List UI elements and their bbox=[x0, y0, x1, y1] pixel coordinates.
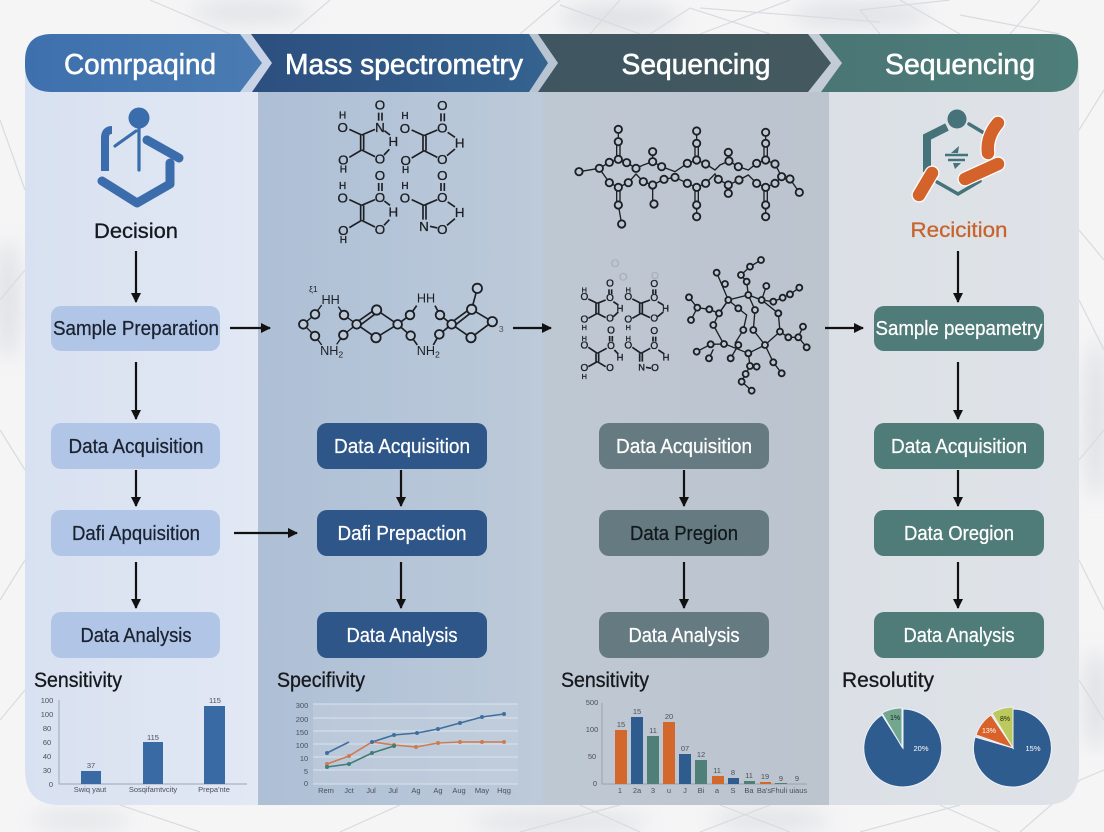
label: Decision: Decision bbox=[94, 220, 178, 243]
molecule: small acid grid: H bbox=[617, 303, 623, 313]
icon: blue hexagon decision bbox=[102, 108, 179, 203]
molecule: four acid structures: H bbox=[402, 165, 409, 176]
bar chart: sensitivity: 80 bbox=[43, 724, 51, 733]
molecule: four acid structures: N bbox=[375, 120, 385, 135]
header: Sequencing right: Sequencing bbox=[885, 49, 1035, 81]
header: Compound: Comrpaqind bbox=[64, 49, 216, 81]
molecule: four acid structures: O bbox=[338, 152, 349, 167]
heading: Specifivity: Specifivity bbox=[277, 669, 365, 692]
molecule: amine chain: HH bbox=[322, 293, 340, 307]
molecule: small acid grid: N bbox=[638, 362, 645, 372]
molecule: small acid grid: O bbox=[607, 325, 615, 336]
header: Mass spectrometry bbox=[251, 34, 548, 92]
molecule: small acid grid: O bbox=[651, 363, 659, 374]
bar chart: sensitivity by category: 9 bbox=[779, 774, 783, 783]
box: Data Acquisition: Data Acquisition bbox=[334, 436, 470, 458]
box: Data Acquisition bbox=[874, 423, 1044, 469]
line chart: specificity: 5 bbox=[304, 767, 308, 776]
molecule: small acid grid: H bbox=[626, 323, 631, 332]
molecule: amine chain: 2 bbox=[435, 349, 440, 359]
bar chart: sensitivity by category: 50 bbox=[588, 752, 596, 761]
bar chart: sensitivity by category: 8 bbox=[731, 768, 735, 777]
header: Sequencing: Sequencing bbox=[622, 49, 770, 81]
molecule: small acid grid: O bbox=[650, 326, 658, 337]
icon: teal and orange hexagon bbox=[919, 110, 998, 195]
line chart: specificity: 300 bbox=[296, 701, 308, 710]
molecule: small acid grid: H bbox=[663, 352, 669, 362]
box: Sample peepametry: Sample peepametry bbox=[876, 318, 1042, 340]
box: Data Pregion bbox=[599, 510, 769, 556]
box: Data Acquisition bbox=[317, 423, 487, 469]
molecule: four acid structures: H bbox=[340, 164, 347, 175]
molecule: four acid structures: O bbox=[400, 190, 410, 205]
bar chart: sensitivity: 30 bbox=[43, 766, 51, 775]
molecule: small acid grid: O bbox=[611, 258, 620, 270]
header: Sequencing bbox=[538, 34, 831, 92]
pie chart: left bbox=[864, 708, 942, 787]
molecule: small acid grid: O bbox=[650, 293, 658, 304]
molecule: amine chain: NH bbox=[320, 344, 338, 358]
bar chart: sensitivity by category: S bbox=[730, 786, 736, 795]
molecule: small acid grid: H bbox=[662, 303, 669, 313]
pie chart: right: 13% bbox=[982, 728, 996, 735]
molecule: small acid grid: O bbox=[651, 271, 659, 282]
bar chart: sensitivity by category: u bbox=[667, 786, 671, 795]
pie chart: right: 8% bbox=[1000, 716, 1010, 723]
flow arrows bbox=[136, 251, 958, 608]
bar chart: sensitivity by category: 12 bbox=[697, 750, 705, 759]
box: Data Analysis: Data Analysis bbox=[628, 625, 740, 647]
molecule: small acid grid: O bbox=[607, 341, 615, 352]
bar chart: sensitivity by category: 3 bbox=[651, 786, 655, 795]
column 1 flow boxes bbox=[51, 306, 220, 658]
bar chart: sensitivity: Prepa'nte bbox=[198, 785, 230, 794]
molecule: small acid grid: O bbox=[624, 340, 632, 351]
box: Sample Preparation bbox=[51, 306, 220, 351]
molecule: four acid structures: H bbox=[455, 135, 464, 150]
molecule: small acid grid: O bbox=[580, 363, 588, 374]
bar chart: sensitivity by category: 11 bbox=[649, 726, 657, 735]
box: Data Analysis: Data Analysis bbox=[904, 625, 1014, 647]
line chart: specificity: 100 bbox=[296, 741, 308, 750]
molecule: four acid structures: H bbox=[389, 134, 398, 149]
box: Data Acquisition bbox=[51, 423, 220, 469]
molecule: small acid grid: H bbox=[617, 352, 623, 362]
bar chart: sensitivity: 60 bbox=[43, 738, 51, 747]
molecule: four acid structures: H bbox=[401, 111, 409, 122]
column 2 flow boxes bbox=[317, 423, 487, 658]
molecule: four acid structures: O bbox=[375, 190, 385, 205]
box: Dafi Apquisition: Dafi Apquisition bbox=[72, 523, 200, 545]
line chart: specificity: Jct bbox=[344, 786, 355, 795]
bar chart: sensitivity by category: 2a bbox=[633, 786, 642, 795]
molecule: four acid structures: O bbox=[375, 97, 385, 112]
bar chart: sensitivity by category: Bi bbox=[698, 786, 705, 795]
molecule: four acid structures: O bbox=[375, 222, 385, 237]
panel: sequencing column bbox=[543, 60, 829, 805]
box: Data Oregion bbox=[874, 510, 1044, 556]
molecule: amine chain: ξ1 bbox=[309, 284, 318, 294]
header: Mass spectrometry: Mass spectrometry bbox=[285, 49, 523, 81]
molecule: small acid grid: O bbox=[650, 313, 658, 324]
bar chart: sensitivity by category: 9 bbox=[795, 774, 799, 783]
line chart: specificity: Jul bbox=[388, 786, 398, 795]
pie chart: left: 1% bbox=[890, 715, 900, 722]
bar chart: sensitivity by category: Fhuli uiaus bbox=[771, 786, 807, 795]
bar chart: sensitivity by category: 1 bbox=[618, 786, 622, 795]
box: Data Oregion: Data Oregion bbox=[904, 523, 1014, 545]
molecule: small acid grid: O bbox=[624, 314, 632, 325]
molecule: four acid structures: O bbox=[437, 98, 448, 113]
line chart: specificity: Rem bbox=[318, 786, 334, 795]
molecule: four acid structures: H bbox=[339, 181, 346, 192]
bar chart: sensitivity by category: 07 bbox=[681, 744, 689, 753]
box: Sample Preparation: Sample Preparation bbox=[53, 318, 219, 340]
molecule: four acid structures: O bbox=[437, 190, 448, 205]
molecule: four acid structures: H bbox=[340, 235, 347, 246]
line chart: specificity: 150 bbox=[296, 728, 308, 737]
bar chart: sensitivity bbox=[41, 696, 247, 794]
molecule: small acid grid: O bbox=[624, 292, 632, 303]
bar chart: sensitivity by category: 11 bbox=[713, 766, 721, 775]
molecule: four acid structures: O bbox=[437, 168, 448, 183]
bar chart: sensitivity by category: 19 bbox=[761, 772, 769, 781]
box: Data Analysis bbox=[599, 612, 769, 658]
heading: Sensitivity: Sensitivity bbox=[561, 669, 649, 692]
box: Data Analysis bbox=[317, 612, 487, 658]
line chart: specificity: Jul bbox=[366, 786, 376, 795]
bar chart: sensitivity by category: Ba bbox=[744, 786, 754, 795]
panel: mass spectrometry column bbox=[258, 60, 543, 805]
box: Data Acquisition bbox=[599, 423, 769, 469]
molecule: four acid structures: H bbox=[339, 110, 346, 121]
bar chart: sensitivity by category: 20 bbox=[665, 712, 673, 721]
line chart: specificity: Ag bbox=[411, 786, 421, 795]
molecule: four acid structures: O bbox=[437, 120, 448, 135]
box: Data Analysis bbox=[874, 612, 1044, 658]
box: Sample peepametry bbox=[874, 306, 1044, 351]
molecule: four acid structures: O bbox=[375, 168, 385, 183]
molecule: small acid grid: O bbox=[580, 314, 588, 325]
molecule: four acid structures: H bbox=[389, 204, 398, 219]
box: Data Analysis bbox=[51, 612, 220, 658]
bar chart: sensitivity by category: 100 bbox=[586, 725, 598, 734]
molecule: four acid structures: O bbox=[437, 152, 448, 167]
line chart: specificity: 200 bbox=[296, 715, 308, 724]
bar chart: sensitivity by category: 11 bbox=[745, 771, 753, 780]
pie chart: right bbox=[973, 707, 1051, 787]
molecule: small acid grid: H bbox=[582, 323, 587, 332]
line chart: specificity bbox=[296, 701, 518, 795]
molecule: small acid grid: H bbox=[582, 334, 587, 343]
molecule: small acid grid: H bbox=[626, 334, 631, 343]
box: Data Acquisition: Data Acquisition bbox=[68, 436, 204, 458]
molecule: small acid grid: H bbox=[626, 285, 631, 294]
bar chart: sensitivity: 115 bbox=[209, 696, 221, 705]
molecule: four acid structures: H bbox=[401, 181, 409, 192]
chevron separator bands bbox=[238, 34, 842, 92]
molecule: four acid structures: O bbox=[437, 222, 448, 237]
box: Data Acquisition: Data Acquisition bbox=[616, 436, 752, 458]
molecule: small acid grid: O bbox=[606, 293, 614, 304]
panel: compound column bbox=[25, 60, 258, 805]
header: Sequencing right bbox=[819, 34, 1078, 92]
bar chart: sensitivity by category: Ba's bbox=[757, 786, 771, 795]
header: Compound bbox=[25, 34, 262, 92]
molecule: linked ring chain bbox=[575, 126, 803, 228]
line chart: specificity: Ag bbox=[433, 786, 443, 795]
molecule: small acid grid: O bbox=[580, 292, 588, 303]
bar chart: sensitivity: 37 bbox=[87, 761, 95, 770]
bar chart: sensitivity by category: 0 bbox=[593, 779, 597, 788]
line chart: specificity: 10 bbox=[300, 754, 308, 763]
molecule: small acid grid: O bbox=[650, 279, 658, 290]
molecule: star shaped network bbox=[686, 257, 810, 394]
molecule: amine chain bbox=[299, 284, 504, 359]
bar chart: sensitivity by category: J bbox=[683, 786, 687, 795]
molecule: small acid grid: O bbox=[606, 313, 614, 324]
bar chart: sensitivity: Swiq yaut bbox=[74, 785, 107, 794]
column 4 flow boxes bbox=[874, 306, 1044, 658]
heading: Resolutity: Resolutity bbox=[842, 669, 934, 692]
bar chart: sensitivity: 0 bbox=[49, 780, 53, 789]
molecule: small acid grid: O bbox=[619, 271, 628, 283]
label: Recicition: Recicition bbox=[910, 219, 1008, 242]
bar chart: sensitivity: Sosqifamtvcity bbox=[129, 785, 177, 794]
line chart: specificity: 0 bbox=[304, 779, 308, 788]
molecule: four acid structures: H bbox=[455, 205, 464, 220]
bar chart: sensitivity by category: a bbox=[715, 786, 720, 795]
molecule: small acid grid bbox=[580, 258, 669, 381]
line chart: specificity: Hqg bbox=[497, 786, 511, 795]
bar chart: sensitivity by category: 15 bbox=[617, 720, 625, 729]
molecule: small acid grid: O bbox=[580, 340, 588, 351]
box: Data Analysis: Data Analysis bbox=[80, 625, 192, 647]
box: Data Pregion: Data Pregion bbox=[630, 523, 738, 545]
box: Dafi Prepaction: Dafi Prepaction bbox=[338, 523, 466, 545]
bar chart: sensitivity: 40 bbox=[43, 752, 51, 761]
molecule: amine chain: NH bbox=[417, 344, 435, 358]
molecule: small acid grid: O bbox=[650, 341, 658, 352]
box: Dafi Prepaction bbox=[317, 510, 487, 556]
heading: Sensitivity: Sensitivity bbox=[34, 669, 122, 692]
molecule: small acid grid: H bbox=[582, 285, 587, 294]
bar chart: sensitivity: 100 bbox=[41, 696, 53, 705]
column 3 flow boxes bbox=[599, 423, 769, 658]
molecule: four acid structures: N bbox=[419, 219, 429, 234]
pie chart: right: 15% bbox=[1025, 744, 1041, 753]
molecule: four acid structures: O bbox=[337, 120, 348, 135]
bar chart: sensitivity: 100 bbox=[41, 710, 53, 719]
line chart: specificity: May bbox=[475, 786, 489, 795]
molecule: small acid grid: H bbox=[582, 372, 587, 381]
molecule: four acid structures: O bbox=[337, 190, 348, 205]
panel: second sequencing column bbox=[829, 60, 1079, 805]
molecule: amine chain: 2 bbox=[338, 349, 343, 359]
molecule: small acid grid: O bbox=[606, 278, 614, 289]
pie chart: left: 20% bbox=[913, 744, 929, 753]
molecule: four acid structures: O bbox=[375, 151, 385, 166]
box: Dafi Apquisition bbox=[51, 510, 220, 556]
line chart: specificity: Aug bbox=[452, 786, 466, 795]
molecule: amine chain: HH bbox=[417, 291, 435, 305]
molecule: amine chain: 3 bbox=[499, 324, 504, 334]
bar chart: sensitivity by category: 15 bbox=[633, 707, 641, 716]
molecule: four acid structures: O bbox=[400, 153, 411, 168]
molecule: four acid structures: O bbox=[400, 121, 410, 136]
bar chart: sensitivity: 115 bbox=[147, 733, 159, 742]
bar chart: sensitivity by category: 500 bbox=[586, 698, 598, 707]
bar chart: sensitivity by category bbox=[586, 698, 807, 795]
box: Data Acquisition: Data Acquisition bbox=[891, 436, 1027, 458]
box: Data Analysis: Data Analysis bbox=[346, 625, 458, 647]
molecule: four acid structures bbox=[337, 97, 464, 246]
molecule: four acid structures: O bbox=[338, 223, 349, 238]
molecule: small acid grid: O bbox=[606, 363, 614, 374]
